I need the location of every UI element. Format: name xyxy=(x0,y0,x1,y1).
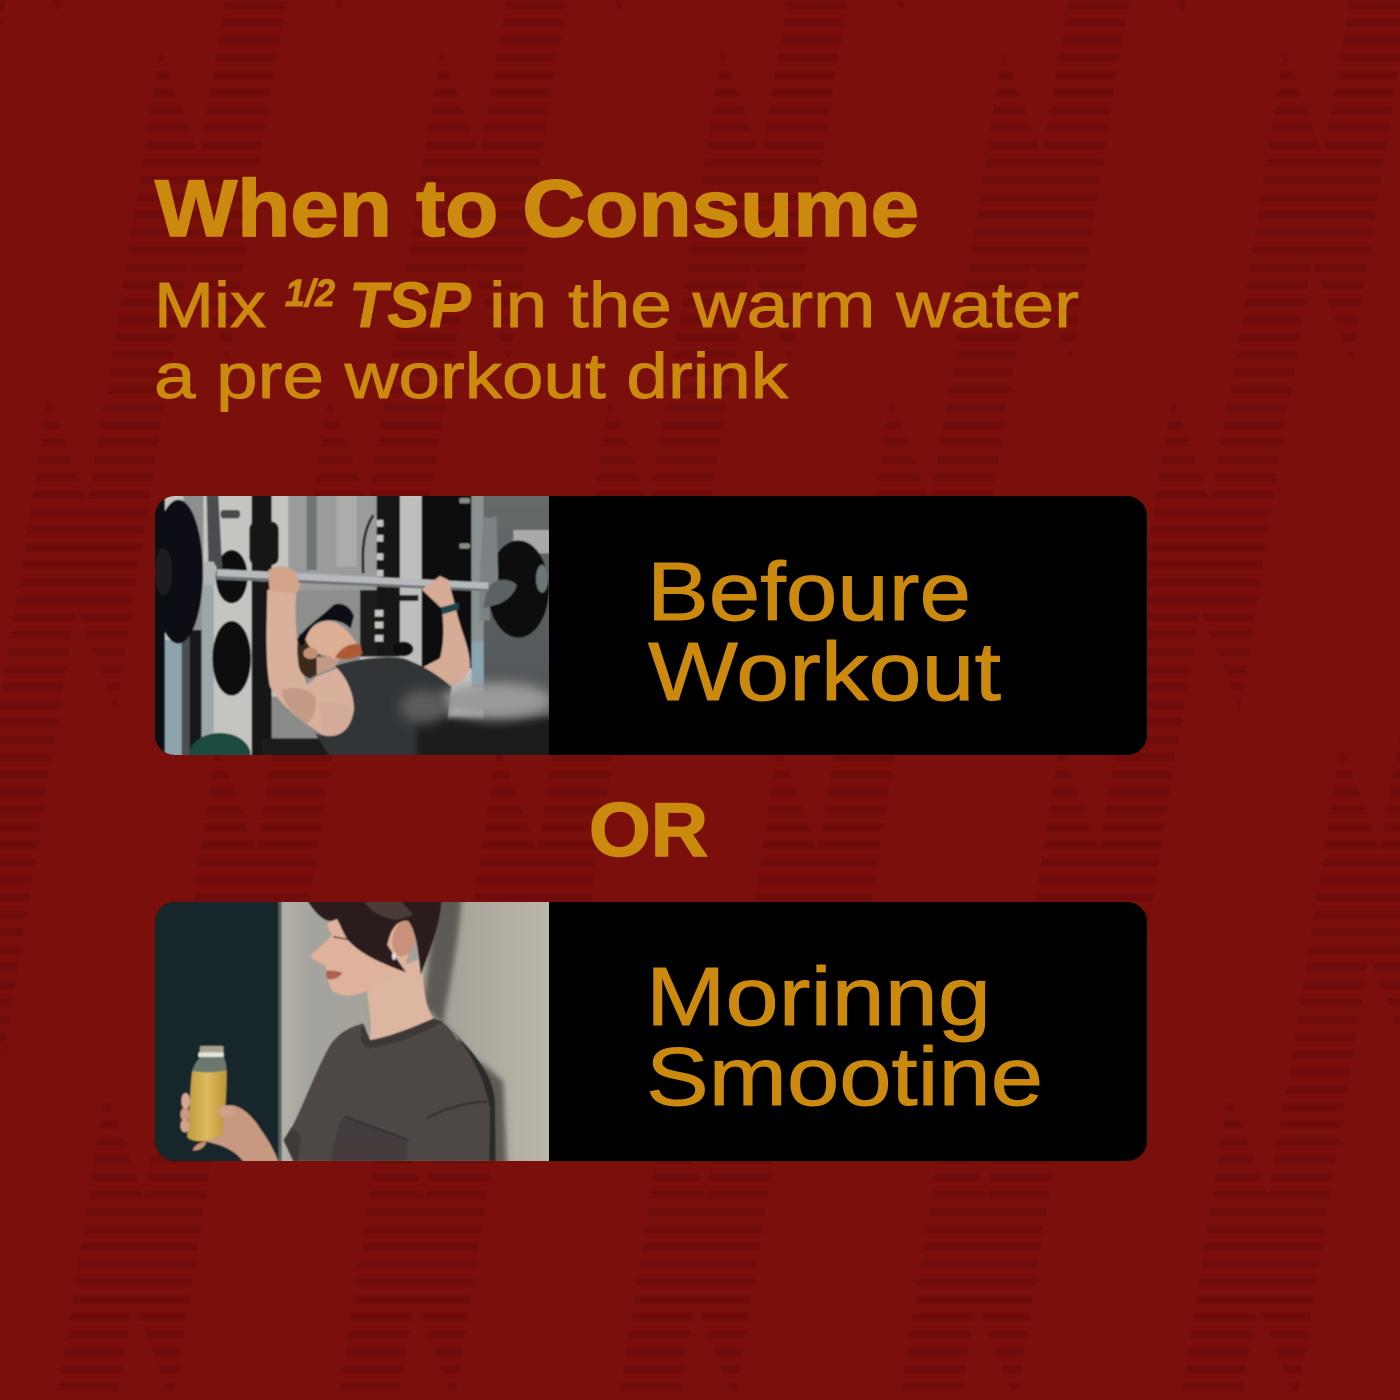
panel background xyxy=(155,902,1147,1161)
neck and face xyxy=(360,958,433,1040)
foreground blur xyxy=(400,682,560,763)
hand xyxy=(205,1105,278,1162)
photo: woman holding smoothie bottle xyxy=(150,895,554,1165)
text: morning smoothie: Smootine xyxy=(646,1030,1043,1123)
man xyxy=(267,590,354,737)
bottle xyxy=(189,1048,228,1106)
instruction text: TSP xyxy=(349,269,471,341)
text: morning smoothie: Morinng xyxy=(646,950,991,1043)
photo: man bench pressing xyxy=(155,496,549,755)
text: before workout xyxy=(647,545,1001,718)
instruction text: in the warm water xyxy=(489,269,1079,341)
instruction text: a pre workout drink xyxy=(154,340,789,412)
instruction text xyxy=(154,269,1079,412)
text: before workout: Workout xyxy=(648,625,1001,718)
shirt xyxy=(283,1018,495,1162)
panel: morning smoothie xyxy=(150,895,1147,1165)
hair xyxy=(307,900,442,975)
instruction text: Mix xyxy=(154,269,266,341)
panel background xyxy=(155,496,1147,755)
text: morning smoothie xyxy=(646,950,1043,1123)
or separator: OR xyxy=(589,788,708,873)
title: When to Consume xyxy=(155,164,919,254)
text: before workout: Befoure xyxy=(647,545,971,638)
panel: before workout xyxy=(155,496,1147,755)
instruction text: 1/2 xyxy=(285,273,335,315)
